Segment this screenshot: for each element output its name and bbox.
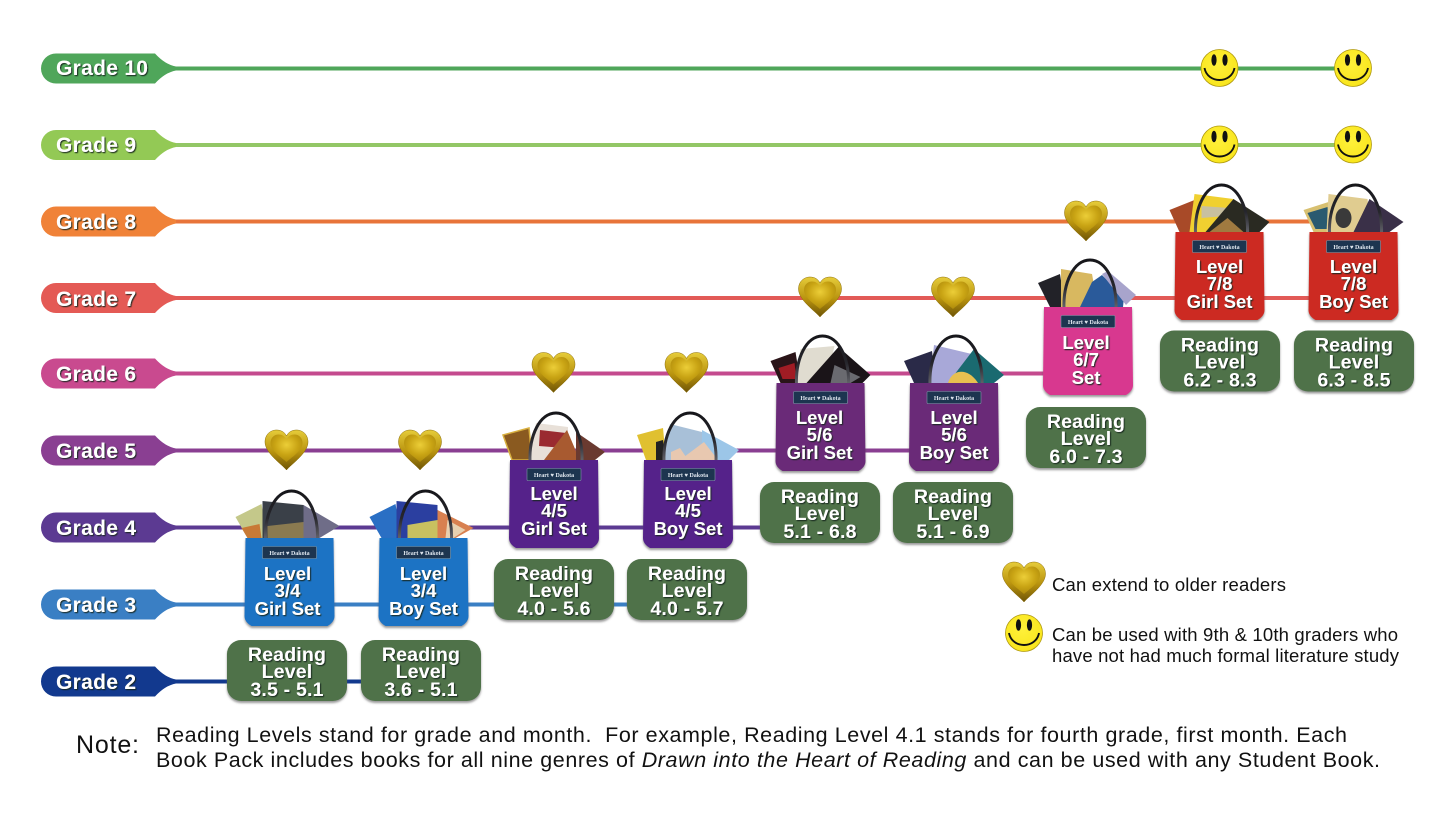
reading level box 4.0 - 5.6: Level xyxy=(529,580,579,602)
reading level box 4.0 - 5.7 xyxy=(627,559,747,620)
grade 5 row: Grade 5 xyxy=(56,440,136,463)
bag: level 4/5 boy set: Heart ♥ Dakota xyxy=(668,473,708,479)
grade 2 row: Grade 2 xyxy=(56,671,136,694)
bag: level 4/5 boy set: Boy Set xyxy=(654,518,722,539)
bag: level 3/4 boy set: Heart ♥ Dakota xyxy=(403,551,444,557)
bag: level 4/5 girl set: Level xyxy=(530,483,578,504)
bag: level 7/8 boy set: Heart ♥ Dakota xyxy=(1333,245,1374,251)
bag: level 6/7 set xyxy=(1038,260,1136,395)
reading level box 3.6 - 5.1: Level xyxy=(396,661,446,683)
grade 9 row xyxy=(41,130,1353,160)
reading level box 3.5 - 5.1 xyxy=(227,640,347,701)
grade 6 row: Grade 6 xyxy=(56,363,136,386)
grade 6 row xyxy=(41,358,1050,388)
bag: level 7/8 boy set: 7/8 xyxy=(1341,273,1366,294)
bag: level 5/6 girl set: Level xyxy=(796,407,843,428)
reading level box 5.1 - 6.9: Level xyxy=(928,503,978,525)
bag: level 7/8 girl set: Girl Set xyxy=(1187,291,1252,312)
bag: level 7/8 boy set: Level xyxy=(1330,256,1377,277)
bag: level 4/5 girl set: 4/5 xyxy=(541,500,567,521)
reading level box 6.0 - 7.3: Reading xyxy=(1047,411,1125,433)
bag: level 4/5 girl set: Girl Set xyxy=(521,518,587,539)
legend text: heart: Can extend to older readers xyxy=(1052,574,1286,595)
grade 3 row: Grade 3 xyxy=(56,594,136,617)
reading level box 5.1 - 6.8: Level xyxy=(795,503,845,525)
reading level box 4.0 - 5.7: Level xyxy=(662,580,712,602)
reading level box 4.0 - 5.7: Reading xyxy=(648,563,726,585)
bag: level 7/8 boy set: Boy Set xyxy=(1319,291,1388,312)
icon: heart level 3/4 boy xyxy=(398,430,442,470)
grade 10 row xyxy=(41,54,1353,84)
bag: level 4/5 girl set: Heart ♥ Dakota xyxy=(534,473,574,479)
grade 8 row xyxy=(41,206,1320,236)
legend text: smiley second line: have not had much formal literature study xyxy=(1052,645,1400,666)
reading level box 6.0 - 7.3 xyxy=(1026,407,1146,468)
note xyxy=(76,723,1380,772)
reading level box 3.6 - 5.1 xyxy=(361,640,481,701)
grade 4 row: Grade 4 xyxy=(56,517,136,540)
reading level box 5.1 - 6.8 xyxy=(760,482,880,543)
reading level box 5.1 - 6.9: Reading xyxy=(914,486,992,508)
bag: level 7/8 girl set: Heart ♥ Dakota xyxy=(1199,245,1240,251)
grade 9 row: Grade 9 xyxy=(56,134,136,157)
icon: smiley grade 10 column 1 xyxy=(1201,50,1238,86)
reading level box 6.3 - 8.5: Reading xyxy=(1315,334,1393,356)
bag: level 5/6 girl set: Girl Set xyxy=(787,442,852,463)
bag: level 6/7 set: Level xyxy=(1062,332,1110,353)
reading level box 6.0 - 7.3: 6.0 - 7.3 xyxy=(1049,446,1123,468)
bag: level 5/6 boy set: 5/6 xyxy=(941,424,967,445)
bag: level 5/6 boy set xyxy=(904,336,1004,471)
grade 8 row: Grade 8 xyxy=(56,211,136,234)
legend xyxy=(1002,562,1400,666)
bag: level 4/5 boy set: 4/5 xyxy=(675,500,701,521)
grade 10 row: Grade 10 xyxy=(56,57,148,80)
icon: heart level 3/4 girl xyxy=(265,430,308,470)
bag: level 5/6 boy set: Heart ♥ Dakota xyxy=(934,396,974,402)
icon: heart level 6/7 xyxy=(1064,201,1108,241)
icon: heart level 5/6 girl xyxy=(798,277,842,317)
bag: level 4/5 boy set xyxy=(637,413,739,548)
note line 2: Book Pack includes books for all nine genres of Drawn into the Heart of Reading and can be used with any Student Book. xyxy=(156,748,1380,772)
legend text: smiley: Can be used with 9th & 10th graders who xyxy=(1052,624,1398,645)
grade 4 row xyxy=(41,512,780,542)
bag: level 3/4 girl set: 3/4 xyxy=(275,580,301,601)
bag: level 6/7 set: Heart ♥ Dakota xyxy=(1068,320,1108,326)
bag: level 5/6 boy set: Level xyxy=(930,407,978,428)
bag: level 5/6 girl set xyxy=(770,336,870,471)
bag: level 3/4 girl set: Level xyxy=(264,563,311,584)
reading level box 4.0 - 5.6: 4.0 - 5.6 xyxy=(517,598,591,620)
reading level box 6.2 - 8.3: Reading xyxy=(1181,334,1259,356)
icon: heart level 4/5 boy xyxy=(665,352,708,392)
note line 1: Reading Levels stand for grade and month. For example, Reading Level 4.1 stands for fourth grade, first month. Each xyxy=(156,723,1347,747)
icon: smiley grade 9 column 2 xyxy=(1334,126,1372,163)
bag: level 3/4 boy set xyxy=(370,491,474,626)
reading level box 6.2 - 8.3 xyxy=(1160,330,1280,392)
bag: level 4/5 boy set: Level xyxy=(664,483,712,504)
icon: smiley grade 10 column 2 xyxy=(1334,50,1372,86)
reading level box 5.1 - 6.9 xyxy=(893,482,1013,543)
note label: Note: xyxy=(76,731,139,759)
bag: level 3/4 girl set: Girl Set xyxy=(255,598,320,619)
bag: level 7/8 girl set: Level xyxy=(1196,256,1243,277)
bag: level 5/6 boy set: Boy Set xyxy=(920,442,988,463)
icon: legend smiley xyxy=(1006,614,1042,652)
reading level box 6.3 - 8.5 xyxy=(1294,330,1414,392)
icon: smiley grade 9 column 1 xyxy=(1201,126,1238,163)
reading level box 3.6 - 5.1: 3.6 - 5.1 xyxy=(384,679,458,701)
reading level box 3.6 - 5.1: Reading xyxy=(382,644,460,666)
reading level box 5.1 - 6.8: 5.1 - 6.8 xyxy=(783,521,857,543)
bag: level 7/8 girl set: 7/8 xyxy=(1207,273,1232,294)
bag: level 3/4 girl set: Heart ♥ Dakota xyxy=(269,551,310,557)
reading level box 6.2 - 8.3: Level xyxy=(1195,352,1245,374)
icon: heart level 4/5 girl xyxy=(532,352,575,392)
bag: level 7/8 girl set xyxy=(1170,185,1270,320)
reading level box 4.0 - 5.7: 4.0 - 5.7 xyxy=(650,598,724,620)
bag: level 5/6 girl set: 5/6 xyxy=(807,424,832,445)
bag: level 4/5 girl set xyxy=(503,413,605,548)
reading level box 3.5 - 5.1: Level xyxy=(262,661,312,683)
icon: heart level 5/6 boy xyxy=(932,277,974,317)
reading level box 4.0 - 5.6 xyxy=(494,559,614,620)
reading level box 3.5 - 5.1: 3.5 - 5.1 xyxy=(250,679,324,701)
bag: level 6/7 set: Set xyxy=(1072,367,1100,388)
reading level box 6.2 - 8.3: 6.2 - 8.3 xyxy=(1183,370,1257,392)
reading level box 5.1 - 6.8: Reading xyxy=(781,486,859,508)
bag: level 3/4 girl set xyxy=(236,491,340,626)
reading level box 5.1 - 6.9: 5.1 - 6.9 xyxy=(916,521,990,543)
icon: legend heart xyxy=(1002,562,1046,602)
reading level box 4.0 - 5.6: Reading xyxy=(515,563,593,585)
bag: level 3/4 boy set: Level xyxy=(400,563,447,584)
grade 7 row xyxy=(41,283,1320,313)
reading level box 6.3 - 8.5: Level xyxy=(1329,352,1379,374)
reading level box 3.5 - 5.1: Reading xyxy=(248,644,326,666)
bag: level 3/4 boy set: Boy Set xyxy=(389,598,458,619)
bag: level 3/4 boy set: 3/4 xyxy=(411,580,437,601)
grade 2 row xyxy=(41,666,370,696)
bag: level 7/8 boy set xyxy=(1304,185,1404,320)
grade 5 row xyxy=(41,436,920,466)
bag: level 5/6 girl set: Heart ♥ Dakota xyxy=(800,396,841,402)
reading level box 6.3 - 8.5: 6.3 - 8.5 xyxy=(1317,370,1391,392)
grade 7 row: Grade 7 xyxy=(56,288,136,311)
bag: level 6/7 set: 6/7 xyxy=(1073,349,1099,370)
reading level box 6.0 - 7.3: Level xyxy=(1061,428,1111,450)
grade 3 row xyxy=(41,590,640,620)
